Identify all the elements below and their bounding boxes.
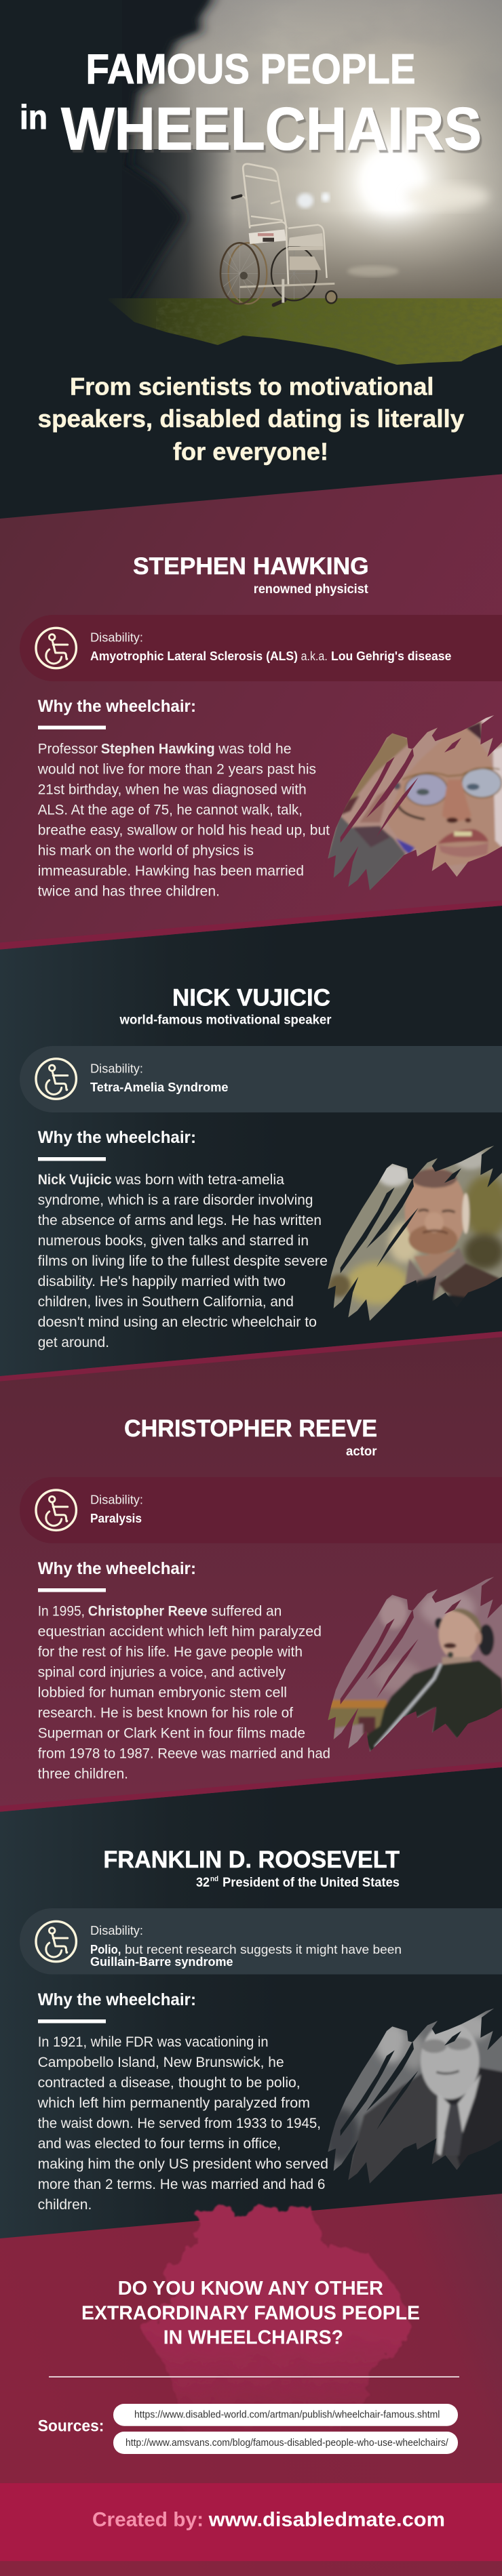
- disability bar: [20, 1477, 502, 1543]
- wheelchair: [220, 164, 336, 305]
- heading: Nick Vujicic: NICK VUJICIC: [172, 984, 330, 1011]
- source link 2: http://www.amsvans.com/blog/famous-disabled-people-who-use-wheelchairs/: [125, 2437, 448, 2449]
- body text: twice and has three children.: [38, 884, 220, 899]
- grass hill: [109, 298, 502, 365]
- disability bar: Disability:: [90, 1062, 143, 1075]
- question: EXTRAORDINARY FAMOUS PEOPLE: [81, 2302, 420, 2324]
- subtitle: From scientists to motivational: [70, 373, 434, 400]
- body text: children, lives in Southern California, and: [38, 1294, 294, 1310]
- subtitle: speakers, disabled dating is literally: [38, 405, 464, 432]
- source link 2: [113, 2432, 458, 2454]
- body text: [38, 1172, 328, 1350]
- icon: wheelchair badge: [36, 1059, 76, 1099]
- question: DO YOU KNOW ANY OTHER: [118, 2278, 383, 2299]
- icon: wheelchair badge: [36, 1490, 76, 1530]
- body text: making him the only US president who served: [38, 2156, 328, 2172]
- heading: Stephen Hawking: STEPHEN HAWKING: [133, 553, 369, 580]
- role: 32: [196, 1876, 210, 1890]
- body text: would not live for more than 2 years past his: [37, 762, 316, 777]
- body text: doesn't mind using an electric wheelchair to: [38, 1314, 317, 1330]
- body text: contracted a disease, thought to be polio,: [38, 2075, 301, 2091]
- body text: [37, 742, 330, 899]
- disability bar: Disability:: [90, 1493, 143, 1506]
- body text: Stephen Hawking: [101, 742, 215, 757]
- disability bar: Tetra-Amelia Syndrome: [90, 1081, 228, 1094]
- portrait: Christopher Reeve: [326, 1575, 502, 1758]
- body text: Professor: [38, 742, 98, 757]
- body text: get around.: [38, 1335, 109, 1350]
- role: actor: [346, 1445, 377, 1459]
- icon: wheelchair badge: [36, 1921, 76, 1962]
- subheading: Why the wheelchair:: [38, 697, 196, 716]
- portrait: Stephen Hawking: [326, 712, 502, 895]
- body text: disability. He's happily married with two: [38, 1274, 286, 1289]
- panel: Christopher Reeve: [0, 1331, 502, 1812]
- body text: the waist down. He served from 1933 to 1945,: [38, 2116, 321, 2131]
- body text: children.: [38, 2197, 92, 2213]
- question: IN WHEELCHAIRS?: [163, 2327, 343, 2348]
- body text: immeasurable. Hawking has been married: [38, 864, 304, 879]
- panel: closing call to action: [0, 2194, 502, 2576]
- role: President of the United States: [223, 1876, 400, 1890]
- body text: 21st birthday, when he was diagnosed with: [38, 782, 307, 797]
- source link 1: [113, 2404, 458, 2426]
- disability bar: Lou Gehrig's disease: [331, 649, 451, 663]
- hero photo: wheelchair under clouds: [102, 0, 502, 365]
- body text: Christopher Reeve: [88, 1604, 208, 1619]
- disability bar: Polio,: [90, 1943, 121, 1956]
- disability bar: [20, 1046, 502, 1112]
- disability bar: Guillain-Barre syndrome: [90, 1955, 233, 1969]
- panel: Franklin D. Roosevelt: [20, 1847, 502, 2213]
- disability bar: [20, 615, 502, 681]
- panel: Nick Vujicic: [20, 984, 502, 1350]
- body text: films on living life to the fullest despite severe: [38, 1253, 328, 1269]
- body text: [37, 2034, 328, 2213]
- body text: In 1921, while FDR was vacationing in: [38, 2034, 268, 2050]
- portrait: Franklin D. Roosevelt: [324, 2005, 502, 2188]
- title word: in: in: [20, 98, 47, 136]
- footer band: www.disabledmate.com: [208, 2508, 445, 2531]
- body text: was told he: [218, 742, 292, 757]
- body text: spinal cord injuries a voice, and actively: [38, 1665, 286, 1680]
- body text: Nick Vujicic: [38, 1172, 112, 1188]
- title line 2: WHEELCHAIRS: [61, 95, 482, 163]
- body text: numerous books, given talks and starred in: [38, 1233, 309, 1249]
- body text: research. He is best known for his role of: [38, 1706, 293, 1720]
- icon: wheelchair badge: [36, 628, 76, 668]
- disability bar: but recent research suggests it might have been: [125, 1943, 402, 1956]
- body text: ALS. At the age of 75, he cannot walk, talk,: [38, 803, 303, 818]
- body text: was born with tetra-amelia: [115, 1172, 284, 1188]
- role: renowned physicist: [254, 582, 368, 597]
- body text: In 1995,: [38, 1604, 85, 1619]
- footer band: [0, 2483, 502, 2561]
- question: [81, 2278, 420, 2348]
- role: world-famous motivational speaker: [119, 1013, 332, 1028]
- body text: three children.: [38, 1767, 128, 1782]
- body text: equestrian accident which left him paralyzed: [38, 1624, 322, 1639]
- sources label: Sources:: [38, 2417, 104, 2435]
- title line 1: FAMOUS PEOPLE: [85, 46, 415, 93]
- disability bar: Amyotrophic Lateral Sclerosis (ALS): [90, 649, 298, 663]
- body text: breathe easy, swallow or hold his head up, but: [38, 823, 330, 838]
- body text: for the rest of his life. He gave people with: [38, 1645, 303, 1659]
- subtitle: for everyone!: [173, 438, 328, 465]
- body text: [38, 1604, 330, 1782]
- subheading: Why the wheelchair:: [38, 1128, 196, 1147]
- disability bar: Disability:: [90, 1924, 143, 1937]
- body text: the absence of arms and legs. He has written: [38, 1213, 322, 1228]
- body text: syndrome, which is a rare disorder involving: [38, 1192, 313, 1208]
- body text: Superman or Clark Kent in four films made: [38, 1726, 305, 1741]
- body text: lobbied for human embryonic stem cell: [38, 1685, 287, 1700]
- disability bar: [20, 1908, 502, 1974]
- role: nd: [210, 1875, 218, 1883]
- body text: from 1978 to 1987. Reeve was married and had: [38, 1746, 330, 1761]
- body text: which left him permanently paralyzed from: [37, 2095, 310, 2111]
- hero header: [0, 0, 502, 522]
- body text: more than 2 terms. He was married and had 6: [38, 2177, 325, 2192]
- body text: his mark on the world of physics is: [38, 843, 254, 858]
- disability bar: Disability:: [90, 630, 143, 644]
- portrait: Nick Vujicic: [326, 1144, 502, 1327]
- body text: suffered an: [212, 1604, 282, 1619]
- heading: Franklin D. Roosevelt: FRANKLIN D. ROOSEVELT: [103, 1847, 400, 1873]
- subtitle: [38, 373, 464, 465]
- disability bar: Paralysis: [90, 1512, 142, 1525]
- paint splash: [141, 2206, 413, 2440]
- source link 1: https://www.disabled-world.com/artman/publish/wheelchair-famous.shtml: [134, 2409, 440, 2420]
- panel: Stephen Hawking: [0, 475, 502, 950]
- heading: Christopher Reeve: CHRISTOPHER REEVE: [124, 1415, 377, 1442]
- subheading: Why the wheelchair:: [38, 1559, 196, 1578]
- disability bar: a.k.a.: [301, 649, 328, 663]
- body text: Campobello Island, New Brunswick, he: [38, 2055, 284, 2070]
- subheading: Why the wheelchair:: [38, 1990, 196, 2009]
- footer band: Created by:: [92, 2508, 204, 2531]
- body text: and was elected to four terms in office,: [38, 2136, 281, 2152]
